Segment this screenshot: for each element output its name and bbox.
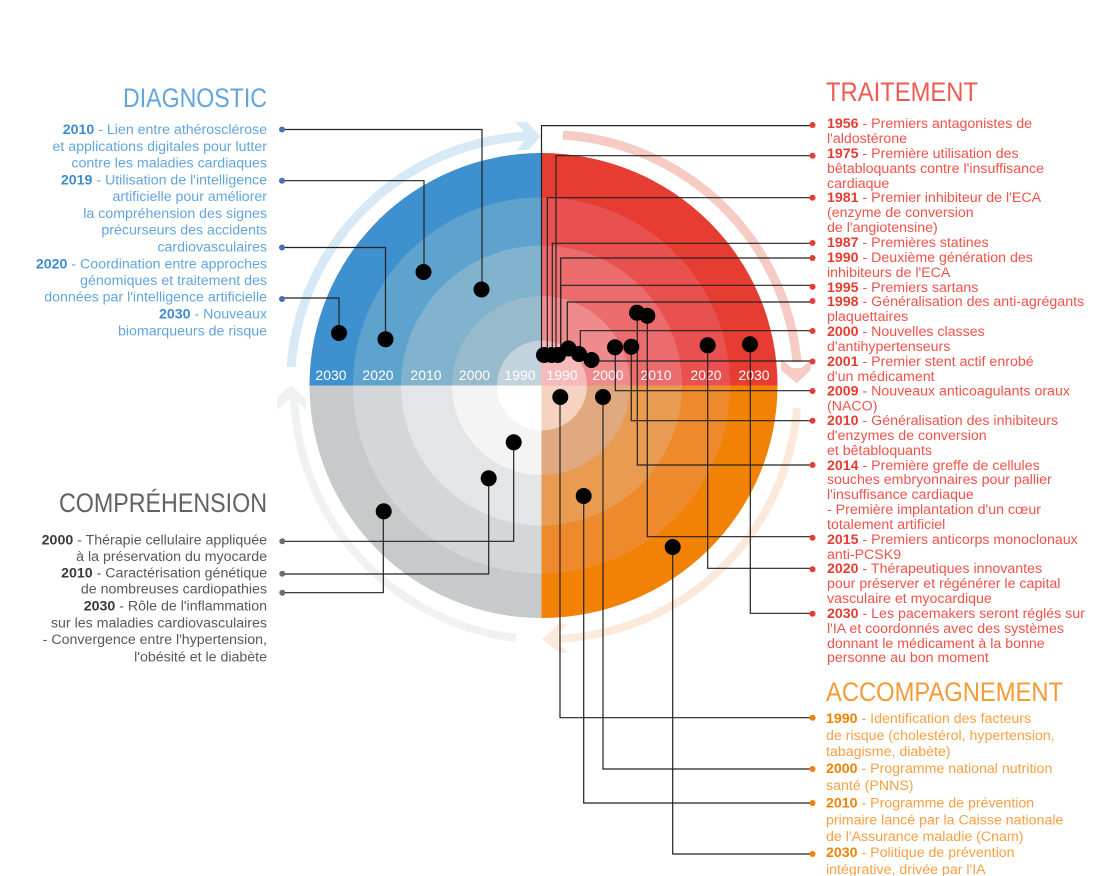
text block: traitement: (enzyme de conversion: [827, 205, 974, 221]
arrow: diagnostic arc: [291, 122, 541, 367]
text block: traitement: d'enzymes de conversion: [827, 428, 987, 444]
text block: traitement: inhibiteurs de l'ECA: [827, 265, 951, 281]
text block: accompagnement: primaire lancé par la Caisse nationale: [826, 812, 1063, 828]
text block: accompagnement: 1990 - Identification des facteurs: [826, 711, 1031, 727]
year labels: 2000: [459, 367, 490, 383]
text block: traitement: 1995 - Premiers sartans: [827, 280, 978, 296]
text block: traitement: pour préserver et régénérer le capital: [827, 576, 1060, 592]
text block: accompagnement: 2030 - Politique de prévention: [826, 845, 1015, 861]
text block: comprehension: à la préservation du myocarde: [76, 549, 267, 565]
text block: traitement: personne au bon moment: [827, 650, 989, 666]
arrow: traitement arc: [563, 135, 811, 383]
text block: traitement: 1990 - Deuxième génération des: [827, 250, 1033, 266]
text block: traitement: (NACO): [827, 398, 877, 414]
text block: traitement: 2015 - Premiers anticorps monoclonaux: [827, 532, 1078, 548]
text block: diagnostic: la compréhension des signes: [83, 206, 267, 222]
text block: traitement: 1981 - Premier inhibiteur de l'ECA: [827, 190, 1042, 206]
text block: traitement: d'antihypertenseurs: [827, 339, 950, 355]
connectors: traitement: [536, 122, 816, 617]
text block: traitement: l'IA et coordonnés avec des systèmes: [827, 621, 1064, 637]
text block: diagnostic: cardiovasculaires: [157, 240, 267, 256]
text block: traitement: 1975 - Première utilisation des: [827, 146, 1019, 162]
text block: diagnostic: génomiques et traitement des: [80, 273, 267, 289]
text block: comprehension: 2010 - Caractérisation génétique: [61, 566, 267, 582]
text block: comprehension: 2000 - Thérapie cellulaire appliquée: [42, 532, 267, 548]
heading: diagnostic: DIAGNOSTIC: [123, 83, 267, 113]
year labels: 2010: [640, 367, 672, 383]
text block: comprehension: 2030 - Rôle de l'inflammation: [84, 599, 267, 615]
connectors: accompagnement: [552, 389, 816, 857]
text block: comprehension: de nombreuses cardiopathies: [81, 582, 267, 598]
text block: traitement: d'un médicament: [827, 369, 935, 385]
text block: traitement: 2010 - Généralisation des inhibiteurs: [827, 413, 1058, 429]
text block: diagnostic: biomarqueurs de risque: [118, 324, 267, 340]
text block: accompagnement: de l'Assurance maladie (Cnam): [826, 829, 1023, 845]
text block: diagnostic: données par l'intelligence artificielle: [44, 290, 267, 306]
arrow: accompagnement arc: [542, 408, 797, 653]
text block: accompagnement: 2000 - Programme national nutrition: [826, 761, 1052, 777]
text block: traitement: - Première implantation d'un cœur: [827, 502, 1041, 518]
text block: diagnostic: [36, 122, 267, 340]
text block: accompagnement: de risque (cholestérol, hypertension,: [826, 728, 1055, 744]
quadrant: accompagnement: [542, 386, 778, 618]
text block: diagnostic: contre les maladies cardiaques: [71, 156, 267, 172]
year labels: 2020: [690, 367, 722, 383]
heading: accompagnement: ACCOMPAGNEMENT: [826, 677, 1063, 707]
text block: accompagnement: [826, 711, 1063, 876]
text block: traitement: anti-PCSK9: [827, 547, 901, 563]
text block: traitement: l'insuffisance cardiaque: [827, 487, 974, 503]
text block: accompagnement: santé (PNNS): [826, 778, 914, 794]
text block: diagnostic: et applications digitales pour lutter: [52, 139, 267, 155]
year labels: 2020: [362, 367, 394, 383]
year labels: 2010: [410, 367, 442, 383]
text block: comprehension: sur les maladies cardiovasculaires: [51, 616, 267, 632]
text block: diagnostic: 2019 - Utilisation de l'intelligence: [61, 172, 267, 188]
text block: comprehension: [42, 532, 267, 666]
text block: comprehension: l'obésité et le diabète: [134, 650, 267, 666]
text block: diagnostic: précurseurs des accidents: [101, 222, 267, 238]
quadrant: diagnostic: [310, 153, 542, 386]
text block: traitement: 1998 - Généralisation des anti-agrégants: [827, 294, 1084, 310]
text block: traitement: 2001 - Premier stent actif enrobé: [827, 354, 1034, 370]
text block: comprehension: - Convergence entre l'hypertension,: [43, 632, 267, 648]
text block: diagnostic: artificielle pour améliorer: [112, 189, 267, 205]
heading: comprehension: COMPRÉHENSION: [59, 488, 267, 518]
text block: traitement: 2000 - Nouvelles classes: [827, 324, 985, 340]
text block: traitement: 2009 - Nouveaux anticoagulants oraux: [827, 384, 1070, 400]
text block: traitement: 2020 - Thérapeutiques innovantes: [827, 561, 1042, 577]
year labels: 1990: [504, 367, 536, 383]
quadrant: comprehension: [310, 386, 542, 618]
connectors: diagnostic: [279, 126, 490, 347]
heading: traitement: TRAITEMENT: [826, 77, 978, 107]
text block: traitement: l'aldostérone: [827, 131, 907, 147]
text block: traitement: plaquettaires: [827, 309, 908, 325]
text block: traitement: de l'angiotensine): [827, 220, 938, 236]
text block: traitement: 1956 - Premiers antagonistes de: [827, 116, 1032, 132]
text block: diagnostic: 2020 - Coordination entre approches: [36, 256, 267, 272]
quadrant: traitement: [542, 153, 778, 386]
year labels: 1990: [546, 367, 578, 383]
text block: diagnostic: 2010 - Lien entre athérosclérose: [63, 122, 267, 138]
text block: traitement: souches embryonnaires pour pallier: [827, 472, 1052, 488]
text block: traitement: 1987 - Premières statines: [827, 235, 989, 251]
text block: traitement: [827, 116, 1085, 666]
text block: traitement: 2014 - Première greffe de cellules: [827, 458, 1040, 474]
text block: traitement: cardiaque: [827, 176, 889, 192]
connectors: comprehension: [279, 434, 522, 596]
text block: diagnostic: 2030 - Nouveaux: [159, 306, 267, 322]
year labels: 2030: [315, 367, 347, 383]
arrow: comprehension arc: [277, 385, 516, 638]
text block: traitement: et bêtabloquants: [827, 443, 932, 459]
text block: traitement: totalement artificiel: [827, 517, 945, 533]
year labels: [315, 367, 770, 383]
year labels: 2030: [738, 367, 770, 383]
text block: accompagnement: 2010 - Programme de prévention: [826, 796, 1034, 812]
year labels: 2000: [592, 367, 624, 383]
text block: traitement: donnant le médicament à la bonne: [827, 636, 1045, 652]
text block: traitement: vasculaire et myocardique: [827, 591, 992, 607]
concentric disc chart: [310, 153, 778, 618]
text block: traitement: bêtabloquants contre l'insuffisance: [827, 161, 1044, 177]
text block: traitement: 2030 - Les pacemakers seront réglés sur: [827, 606, 1085, 622]
text block: accompagnement: tabagisme, diabète): [826, 744, 951, 760]
